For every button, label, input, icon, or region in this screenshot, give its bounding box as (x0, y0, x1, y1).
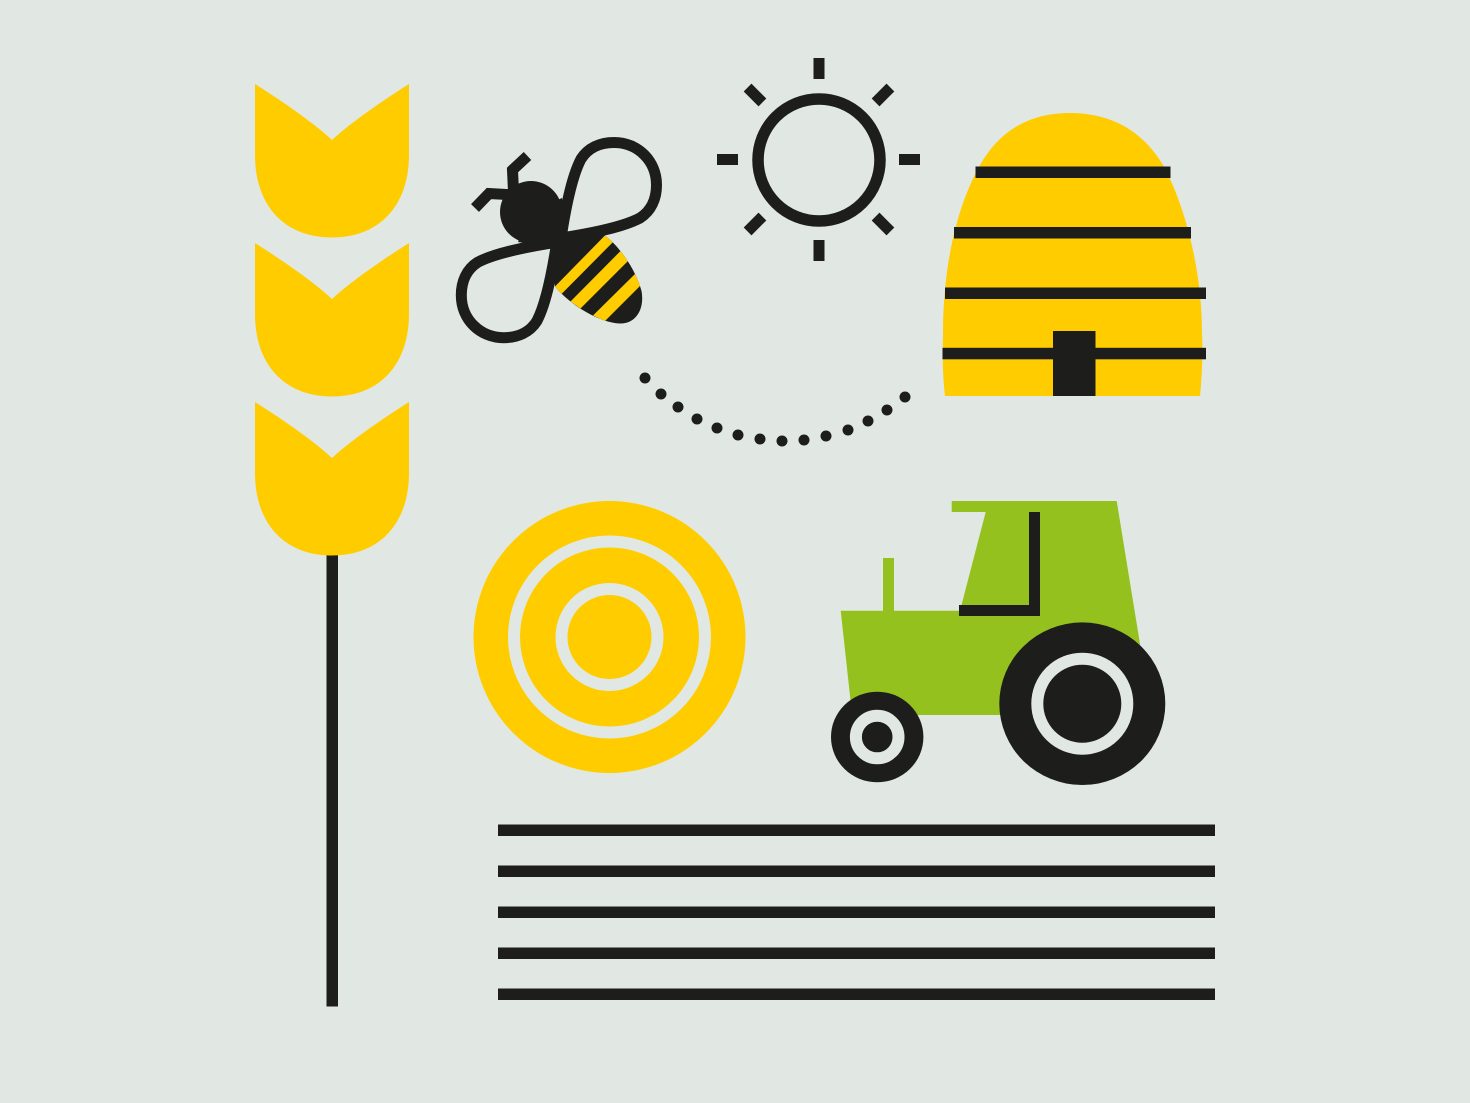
hay outer ring (514, 542, 705, 732)
bee stripes (555, 236, 640, 321)
hay bale disc (474, 501, 746, 773)
tractor body (841, 501, 1141, 715)
hive bands (942, 166, 1206, 359)
sun rays (717, 58, 920, 261)
bee antenna left (475, 194, 516, 208)
tractor rear wheel (999, 622, 1165, 785)
bee upper wing (561, 142, 656, 238)
infographic: farm icon set (255, 58, 1215, 1006)
icon: beehive (942, 113, 1206, 396)
bee abdomen (555, 236, 642, 324)
bee thorax (518, 198, 605, 286)
icon: hay bale (474, 501, 746, 773)
bee lower wing (461, 242, 557, 338)
wheat grain bottom (255, 402, 409, 556)
bee antenna right (512, 156, 528, 192)
icon: wheat ear (255, 84, 409, 1006)
wheat grain top (255, 84, 409, 238)
icon: bee (461, 142, 656, 338)
sun disc (758, 99, 880, 221)
wheat stem (326, 550, 338, 1006)
icon: tractor (831, 501, 1165, 785)
tractor cab frame (959, 512, 1040, 616)
hay inner ring (562, 589, 658, 685)
bee head (500, 181, 562, 243)
dotted bee flight path (640, 372, 910, 446)
wheat grain middle (255, 243, 409, 396)
tractor front wheel (831, 692, 923, 782)
hive door (1053, 331, 1096, 396)
ploughed field lines (498, 824, 1215, 1000)
hive dome (943, 113, 1202, 396)
icon: sun (717, 58, 920, 261)
